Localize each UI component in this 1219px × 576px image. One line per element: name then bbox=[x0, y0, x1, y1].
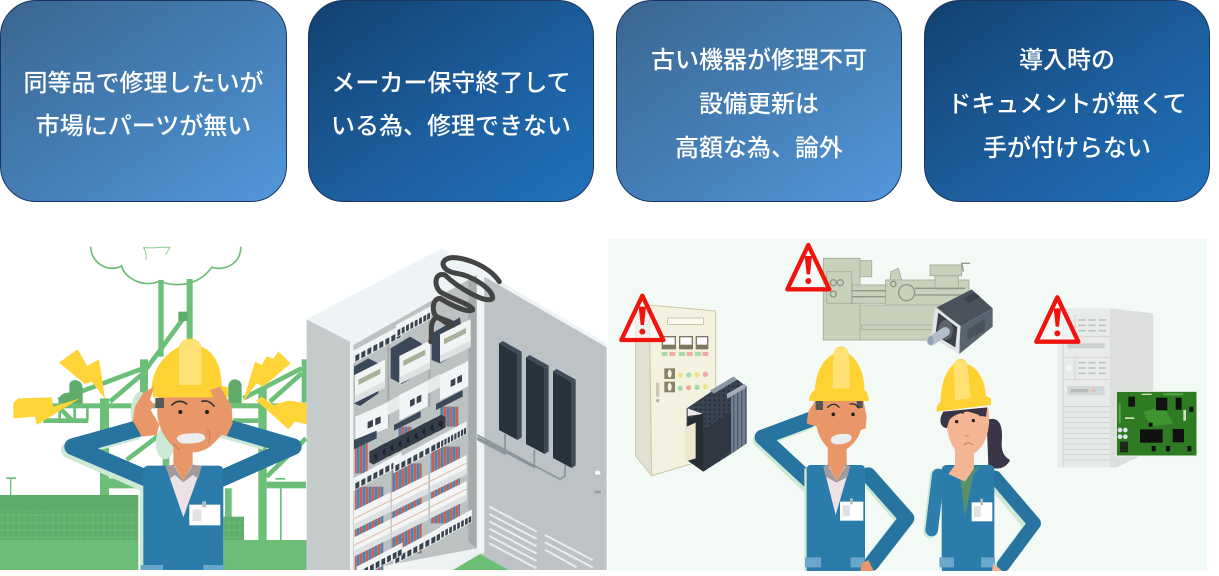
card: replacement too expensive: 設備更新は bbox=[699, 91, 819, 118]
lightning bolts bbox=[13, 349, 307, 429]
spring coil bbox=[431, 258, 499, 342]
wire bundles bbox=[355, 407, 460, 572]
PLC module bbox=[685, 377, 747, 472]
scene: open control cabinet bbox=[307, 248, 607, 576]
card: no documentation: ドキュメントが無くて bbox=[947, 91, 1187, 118]
power meters and switches bbox=[354, 317, 471, 442]
scene: stressed worker in front of green plant bbox=[0, 247, 607, 576]
man scratching head bbox=[760, 346, 907, 573]
card: equivalent parts unavailable bbox=[0, 0, 287, 202]
card: maker support ended bbox=[308, 0, 594, 202]
woman thinking bbox=[930, 359, 1034, 573]
card: no documentation: 導入時の bbox=[1019, 47, 1115, 74]
card: no documentation bbox=[924, 0, 1210, 202]
warning sign: lathe bbox=[787, 245, 829, 289]
card: no documentation: 手が付けらない bbox=[983, 135, 1151, 162]
cabinet body bbox=[307, 248, 483, 572]
card: maker support ended: いる為、修理できない bbox=[331, 113, 571, 140]
warning sign: server bbox=[1036, 297, 1078, 342]
card: replacement too expensive: 高額な為、論外 bbox=[675, 135, 843, 162]
worker holding head bbox=[69, 339, 293, 572]
terminal modules bbox=[354, 455, 467, 557]
breaker rows bbox=[353, 306, 472, 576]
panel: pale green background bbox=[608, 239, 1207, 571]
circuit board bbox=[1116, 391, 1197, 456]
servo motor bbox=[928, 289, 993, 354]
old control panel bbox=[636, 305, 716, 476]
vertical rails bbox=[387, 320, 430, 427]
terminal bars and current transformers bbox=[354, 390, 463, 465]
old lathe bbox=[823, 258, 970, 340]
green plant background bbox=[0, 247, 307, 572]
server tower bbox=[1057, 308, 1153, 467]
card: maker support ended: メーカー保守終了して bbox=[331, 70, 571, 97]
card: equivalent parts unavailable: 市場にパーツが無い bbox=[36, 113, 251, 140]
open door bbox=[450, 268, 607, 572]
card: equivalent parts unavailable: 同等品で修理したいが bbox=[24, 70, 264, 97]
illustrations bbox=[0, 239, 1207, 571]
card: replacement too expensive: 古い機器が修理不可 bbox=[651, 47, 867, 74]
warning sign: panel bbox=[621, 296, 663, 340]
scene: workers and aging equipment bbox=[621, 245, 1197, 573]
card: replacement too expensive bbox=[616, 0, 902, 202]
